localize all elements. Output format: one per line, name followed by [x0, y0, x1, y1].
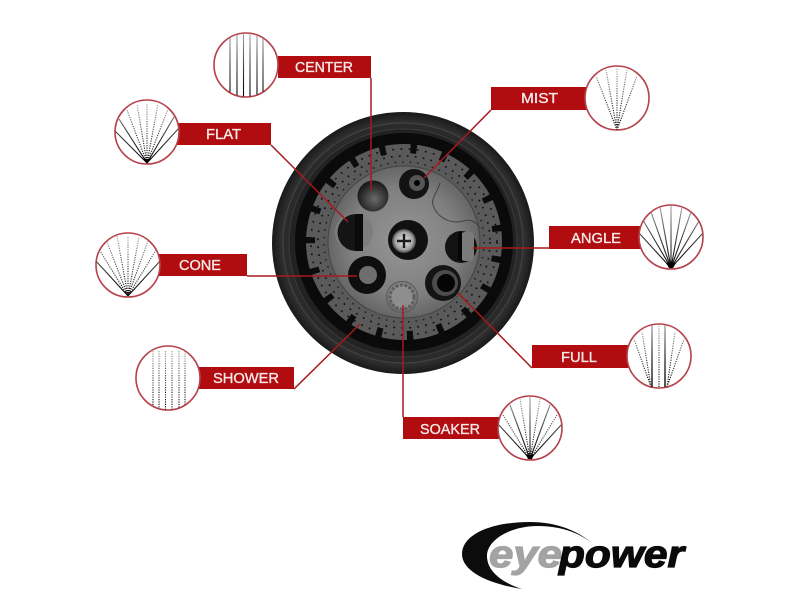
label: mist	[491, 87, 588, 110]
flat port	[335, 213, 373, 251]
angle port	[445, 231, 477, 263]
infographic canvas	[95, 32, 704, 589]
label: soaker	[403, 417, 500, 439]
icon: full spray	[627, 324, 691, 388]
label: cone: CONE	[179, 257, 221, 274]
nozzle head	[272, 112, 534, 374]
label: shower: SHOWER	[213, 370, 279, 387]
leader: cone	[247, 275, 357, 277]
perforated ring	[305, 143, 503, 341]
icon: angle spray	[639, 205, 703, 269]
label: full: FULL	[561, 349, 597, 366]
logo word: power: power	[558, 534, 686, 576]
label: center: CENTER	[295, 59, 353, 76]
leader: mist	[424, 110, 491, 178]
label: mist: MIST	[521, 90, 558, 107]
centre disc	[328, 166, 480, 318]
leader: soaker	[402, 305, 404, 417]
label: cone	[158, 254, 247, 276]
icon: mist spray	[585, 66, 649, 130]
full port	[425, 265, 461, 301]
label: angle: ANGLE	[571, 230, 621, 247]
cone port	[348, 256, 386, 294]
recessed outline	[433, 183, 480, 228]
logo word: eye: eye	[489, 534, 562, 576]
label: flat	[176, 123, 271, 145]
label: shower	[198, 367, 294, 389]
label: flat: FLAT	[206, 126, 241, 143]
logo swoosh	[462, 522, 597, 589]
mist port	[399, 169, 429, 199]
leader: center	[370, 78, 372, 190]
icon: shower spray	[136, 346, 200, 410]
outer rubber grip	[272, 112, 534, 374]
label: soaker: SOAKER	[420, 421, 480, 438]
screw	[388, 220, 428, 260]
soaker port	[386, 282, 418, 312]
leader: angle	[473, 247, 549, 249]
center port	[358, 180, 388, 212]
icon: center spray	[214, 33, 278, 97]
label: center	[278, 56, 371, 78]
icon: soaker spray	[498, 396, 562, 460]
leader: full	[458, 293, 532, 368]
icon: cone spray	[96, 233, 160, 297]
label: full	[532, 345, 630, 368]
leader: flat	[271, 145, 348, 222]
logo: eyepower	[462, 522, 686, 589]
leader: shower	[294, 324, 360, 389]
label: angle	[549, 226, 642, 249]
icon: flat spray	[115, 100, 179, 164]
